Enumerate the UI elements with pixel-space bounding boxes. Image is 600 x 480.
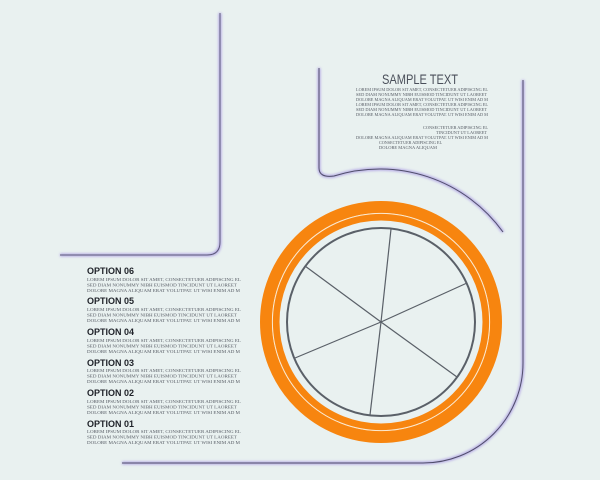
option 01: LOREM IPSUM DOLOR SIT AMET, CONSECTETUER ADIPISCING EL bbox=[87, 429, 241, 435]
frame: top right with arc bbox=[319, 68, 503, 232]
option 03 bbox=[87, 358, 241, 384]
option 04: OPTION 04 bbox=[87, 327, 134, 337]
text block: sample body: LOREM IPSUM DOLOR SIT AMET, CONSECTETUER ADIPISCING EL bbox=[356, 87, 488, 93]
option 04: LOREM IPSUM DOLOR SIT AMET, CONSECTETUER ADIPISCING EL bbox=[87, 338, 241, 344]
text block: sample body bbox=[356, 87, 488, 150]
option 02 bbox=[87, 388, 241, 415]
option 04 bbox=[87, 327, 241, 354]
option 03: DOLORE MAGNA ALIQUAM ERAT VOLUTPAT. UT WISI ENIM AD M bbox=[87, 379, 240, 384]
option 02: OPTION 02 bbox=[87, 388, 134, 398]
option 05: LOREM IPSUM DOLOR SIT AMET, CONSECTETUER ADIPISCING EL bbox=[87, 307, 241, 313]
wheel chart bbox=[266, 207, 496, 437]
option 05: OPTION 05 bbox=[87, 296, 134, 306]
option 01: DOLORE MAGNA ALIQUAM ERAT VOLUTPAT. UT WISI ENIM AD M bbox=[87, 440, 240, 445]
option 06: OPTION 06 bbox=[87, 266, 134, 276]
option 05: DOLORE MAGNA ALIQUAM ERAT VOLUTPAT. UT WISI ENIM AD M bbox=[87, 318, 240, 323]
option 01 bbox=[87, 419, 241, 445]
option 04: SED DIAM NONUMMY NIBH EUISMOD TINCIDUNT UT LAOREET bbox=[87, 344, 237, 348]
option 06: LOREM IPSUM DOLOR SIT AMET, CONSECTETUER ADIPISCING EL bbox=[87, 277, 241, 283]
option 01: OPTION 01 bbox=[87, 419, 134, 429]
option 02: DOLORE MAGNA ALIQUAM ERAT VOLUTPAT. UT WISI ENIM AD M bbox=[87, 410, 240, 415]
title: sample text: SAMPLE TEXT bbox=[382, 72, 458, 87]
option list bbox=[87, 266, 241, 445]
option 06: DOLORE MAGNA ALIQUAM ERAT VOLUTPAT. UT WISI ENIM AD M bbox=[87, 288, 240, 293]
text block: sample body: SED DIAM NONUMMY NIBH EUISMOD TINCIDUNT UT LAOREET bbox=[356, 92, 487, 97]
option 05: SED DIAM NONUMMY NIBH EUISMOD TINCIDUNT UT LAOREET bbox=[87, 312, 237, 318]
text block: sample body: DOLORE MAGNA ALIQUAM bbox=[379, 145, 437, 150]
text block: sample body: CONSECTETUER ADIPISCING EL bbox=[423, 125, 488, 130]
text block: sample body: DOLORE MAGNA ALIQUAM ERAT VOLUTPAT. UT WISI ENIM AD M bbox=[356, 135, 488, 140]
text block: sample body: DOLORE MAGNA ALIQUAM ERAT VOLUTPAT. UT WISI ENIM AD M bbox=[356, 97, 488, 102]
text block: sample body: DOLORE MAGNA ALIQUAM ERAT VOLUTPAT. UT WISI ENIM AD M bbox=[356, 112, 488, 117]
text block: sample body: TINCIDUNT UT LAOREET bbox=[436, 130, 487, 135]
option 02: SED DIAM NONUMMY NIBH EUISMOD TINCIDUNT UT LAOREET bbox=[87, 404, 237, 410]
option 06 bbox=[87, 266, 241, 293]
option 03: SED DIAM NONUMMY NIBH EUISMOD TINCIDUNT UT LAOREET bbox=[87, 374, 237, 378]
frame: left bbox=[60, 13, 220, 255]
text block: sample body: SED DIAM NONUMMY NIBH EUISMOD TINCIDUNT UT LAOREET bbox=[356, 107, 487, 112]
text block: sample body: LOREM IPSUM DOLOR SIT AMET, CONSECTETUER ADIPISCING EL bbox=[356, 102, 488, 108]
text block: sample body: CONSECTETUER ADIPISCING EL bbox=[379, 140, 442, 145]
option 04: DOLORE MAGNA ALIQUAM ERAT VOLUTPAT. UT WISI ENIM AD M bbox=[87, 349, 240, 354]
frame: right and bottom bbox=[122, 80, 523, 463]
option 03: OPTION 03 bbox=[87, 358, 134, 368]
option 03: LOREM IPSUM DOLOR SIT AMET, CONSECTETUER ADIPISCING EL bbox=[87, 368, 241, 374]
option 06: SED DIAM NONUMMY NIBH EUISMOD TINCIDUNT UT LAOREET bbox=[87, 282, 237, 288]
option 02: LOREM IPSUM DOLOR SIT AMET, CONSECTETUER ADIPISCING EL bbox=[87, 399, 241, 405]
option 01: SED DIAM NONUMMY NIBH EUISMOD TINCIDUNT UT LAOREET bbox=[87, 434, 237, 440]
option 05 bbox=[87, 296, 241, 323]
